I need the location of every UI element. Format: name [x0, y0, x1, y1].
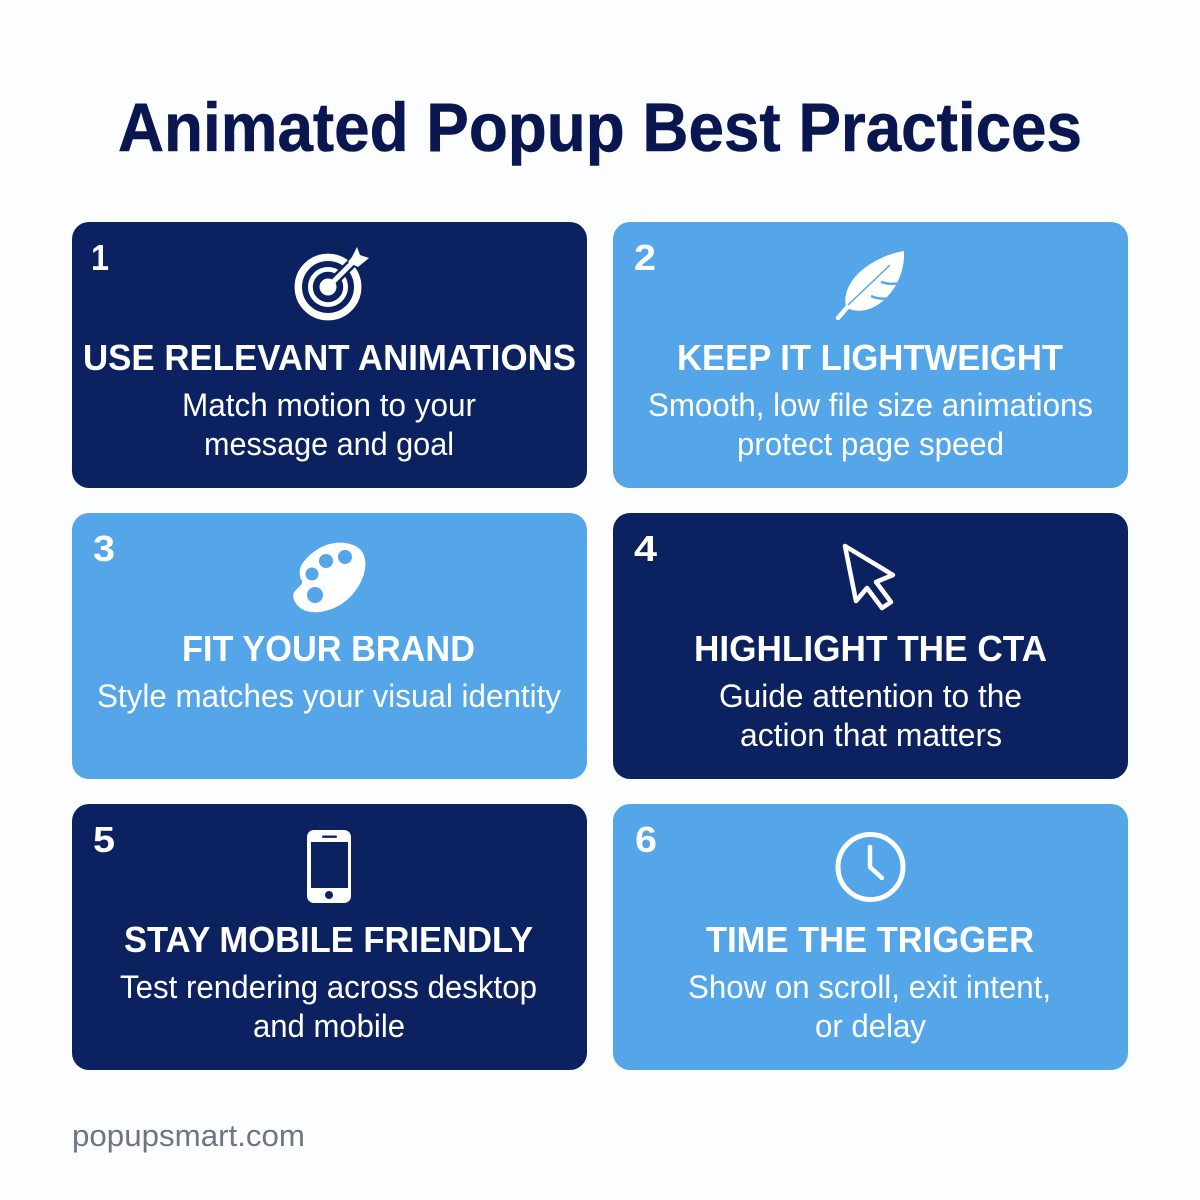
description — [688, 969, 1051, 1044]
panel: use relevant animations — [72, 222, 587, 488]
panel: highlight the cta — [613, 513, 1128, 779]
number 4: 4 — [634, 528, 657, 569]
heading: STAY MOBILE FRIENDLY — [124, 919, 533, 960]
icon: cursor arrow — [845, 546, 893, 608]
number 1: 1 — [91, 237, 109, 278]
heading: HIGHLIGHT THE CTA — [694, 628, 1047, 669]
icon: palette — [293, 543, 365, 612]
heading: TIME THE TRIGGER — [706, 919, 1034, 960]
description: or delay — [815, 1008, 926, 1044]
number 3: 3 — [93, 528, 115, 569]
description: protect page speed — [737, 426, 1004, 462]
footer: source: popupsmart.com — [72, 1118, 305, 1153]
panel: keep it lightweight — [613, 222, 1128, 488]
description — [648, 387, 1093, 462]
description: message and goal — [204, 426, 454, 462]
number 6: 6 — [635, 819, 657, 860]
description: Show on scroll, exit intent, — [688, 969, 1051, 1005]
panel: fit your brand — [72, 513, 587, 779]
heading: FIT YOUR BRAND — [182, 628, 475, 669]
title: Animated Popup Best Practices — [118, 89, 1082, 166]
panel: time the trigger — [613, 804, 1128, 1070]
heading: KEEP IT LIGHTWEIGHT — [677, 337, 1063, 378]
description — [182, 387, 476, 462]
heading: USE RELEVANT ANIMATIONS — [83, 337, 576, 378]
icon: smartphone — [307, 830, 351, 903]
description: Smooth, low file size animations — [648, 387, 1093, 423]
description — [719, 678, 1022, 753]
icon: target with arrow — [298, 247, 369, 317]
icon: feather — [838, 251, 904, 318]
number 2: 2 — [634, 237, 656, 278]
description: Test rendering across desktop — [120, 969, 537, 1005]
icon: clock — [838, 834, 903, 900]
description: and mobile — [253, 1008, 405, 1044]
description: action that matters — [740, 717, 1002, 753]
description: Match motion to your — [182, 387, 476, 423]
panel: stay mobile friendly — [72, 804, 587, 1070]
description — [120, 969, 537, 1044]
description: Style matches your visual identity — [97, 678, 561, 714]
number 5: 5 — [93, 819, 115, 860]
description: Guide attention to the — [719, 678, 1022, 714]
